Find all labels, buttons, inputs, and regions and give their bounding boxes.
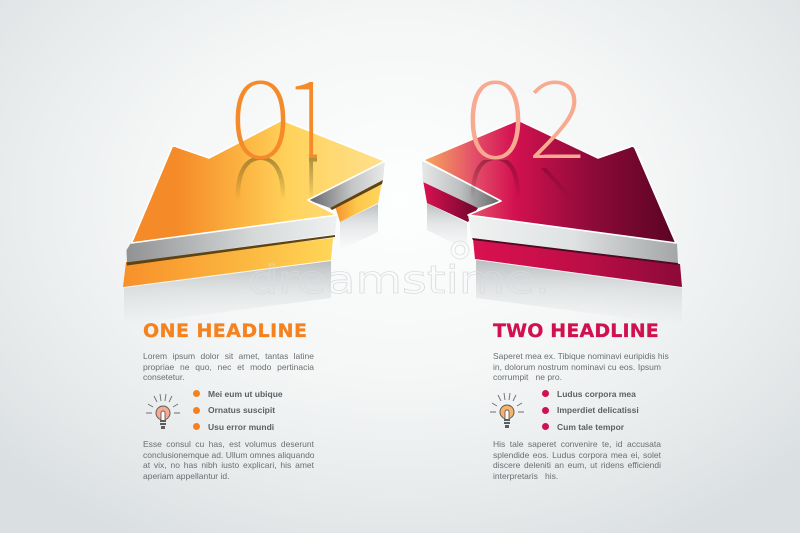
right arrow shadow [476, 260, 682, 325]
text block: body left: Esse consul cu has, est volumus deserunt [143, 439, 314, 449]
text block: body right [493, 439, 661, 481]
bullet list left: Usu error mundi [208, 422, 274, 432]
bullet list right: Imperdiet delicatissi [557, 405, 639, 415]
heading: two headline: TWO HEADLINE [493, 320, 659, 342]
left arrow front yellow side [123, 238, 333, 287]
left arrow rear shadow [340, 204, 378, 250]
watermark: dreamstime. [248, 258, 550, 302]
bullet list right [542, 389, 639, 432]
text block: body right: His tale saperet convenire te, id accusata [493, 439, 661, 449]
right arrow rear grey side [422, 161, 501, 208]
text block: body right: discere deleniti an eum, ut ridens efficiendi [493, 460, 661, 470]
text block: intro left: Lorem ipsum dolor sit amet, tantas latine [143, 351, 314, 361]
left arrow front grey side [126, 215, 337, 263]
text block: intro left: consetetur. [143, 372, 185, 382]
number reflections [236, 158, 566, 198]
text block: body left: at vix, no has nibh iusto explicari, his amet [143, 460, 314, 470]
panel: one headline text [143, 320, 315, 481]
text block: intro right [493, 351, 669, 382]
panel: two headline text [492, 320, 669, 481]
bullet list left: Ornatus suscipit [208, 405, 275, 415]
text block: intro right: corrumpit ne pro. [493, 372, 562, 382]
right arrow [422, 120, 682, 325]
right arrow front crimson side [473, 239, 682, 287]
watermark [248, 241, 550, 302]
bullet list right: Cum tale tempor [557, 422, 624, 432]
text block: body right: splendide eos. Ludus corpora mea ei, solet [493, 450, 661, 460]
text block: body right: interpretaris his. [493, 471, 558, 481]
icon: left lightbulb [146, 394, 180, 429]
text block: body left [143, 439, 315, 481]
text block: body left: aperiam appellantur id. [143, 471, 229, 481]
bullet list left: Mei eum ut ubique [208, 389, 283, 399]
right arrow front grey side [468, 215, 678, 263]
arrows and numbers artwork [123, 80, 682, 429]
heading: one headline: ONE HEADLINE [143, 320, 307, 342]
right arrow rear crimson side [423, 180, 478, 222]
left arrow top face [132, 120, 385, 243]
text block: intro left [143, 351, 314, 382]
text block: intro left: propriae ne quo, nec et modo pertinacia [143, 362, 314, 372]
right arrow top face [423, 120, 676, 243]
left arrow [123, 120, 385, 325]
left arrow shadow [124, 261, 331, 325]
text block: body left: conclusionemque ad. Ullum omnes aliquando [143, 450, 315, 460]
text block: intro right: in, dolorum nostrum nominavi cu eos. Ipsum [493, 362, 661, 372]
text block: intro right: Saperet mea ex. Tibique nominavi euripidis his [493, 351, 669, 361]
left arrow rear yellow side [333, 182, 382, 222]
icon: right lightbulb [490, 393, 524, 428]
number 02 [464, 33, 586, 190]
bullet list left [193, 389, 283, 432]
left arrow rear grey side [308, 161, 385, 208]
number 01 [229, 34, 337, 190]
bullet list right: Ludus corpora mea [557, 389, 636, 399]
right arrow rear shadow [427, 203, 467, 250]
